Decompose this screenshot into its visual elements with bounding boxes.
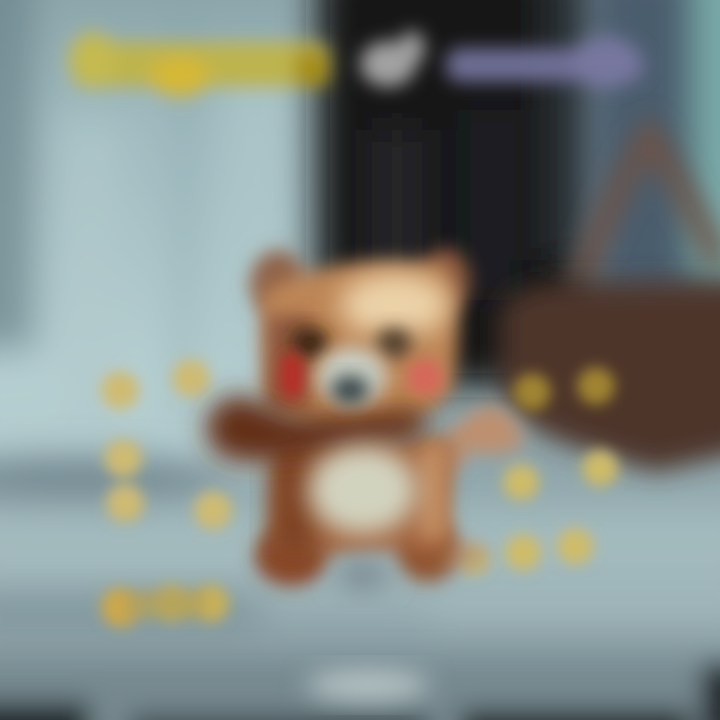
bear body <box>270 440 452 555</box>
bear cheeks <box>279 351 443 399</box>
bear right arm <box>440 405 522 475</box>
yellow dots, right group <box>460 367 618 575</box>
panel: dark centre backdrop <box>318 0 595 385</box>
floor gap between legs <box>335 558 391 592</box>
bear belly <box>308 445 418 535</box>
bag handle <box>578 135 720 285</box>
bear snout <box>317 347 387 405</box>
title word: yellow <box>69 32 330 96</box>
bear left ear <box>250 250 306 318</box>
bag body <box>500 280 720 472</box>
white blur at the bottom <box>306 670 430 700</box>
panel: floor <box>0 458 720 670</box>
bear eyes <box>291 327 412 359</box>
bear left arm and chest shadow <box>205 396 430 462</box>
bear right ear <box>422 248 470 312</box>
panel: dark foreground strip <box>0 660 720 720</box>
bag <box>500 135 720 472</box>
title word: purple <box>446 36 644 88</box>
bear head <box>262 261 458 430</box>
title word: white <box>360 31 425 87</box>
yellow dots, left group <box>101 359 232 627</box>
panel: left curtain <box>0 0 305 490</box>
teddy bear <box>205 248 522 592</box>
bear legs <box>255 518 487 586</box>
title <box>69 31 644 96</box>
panel: right backdrop <box>590 0 720 310</box>
